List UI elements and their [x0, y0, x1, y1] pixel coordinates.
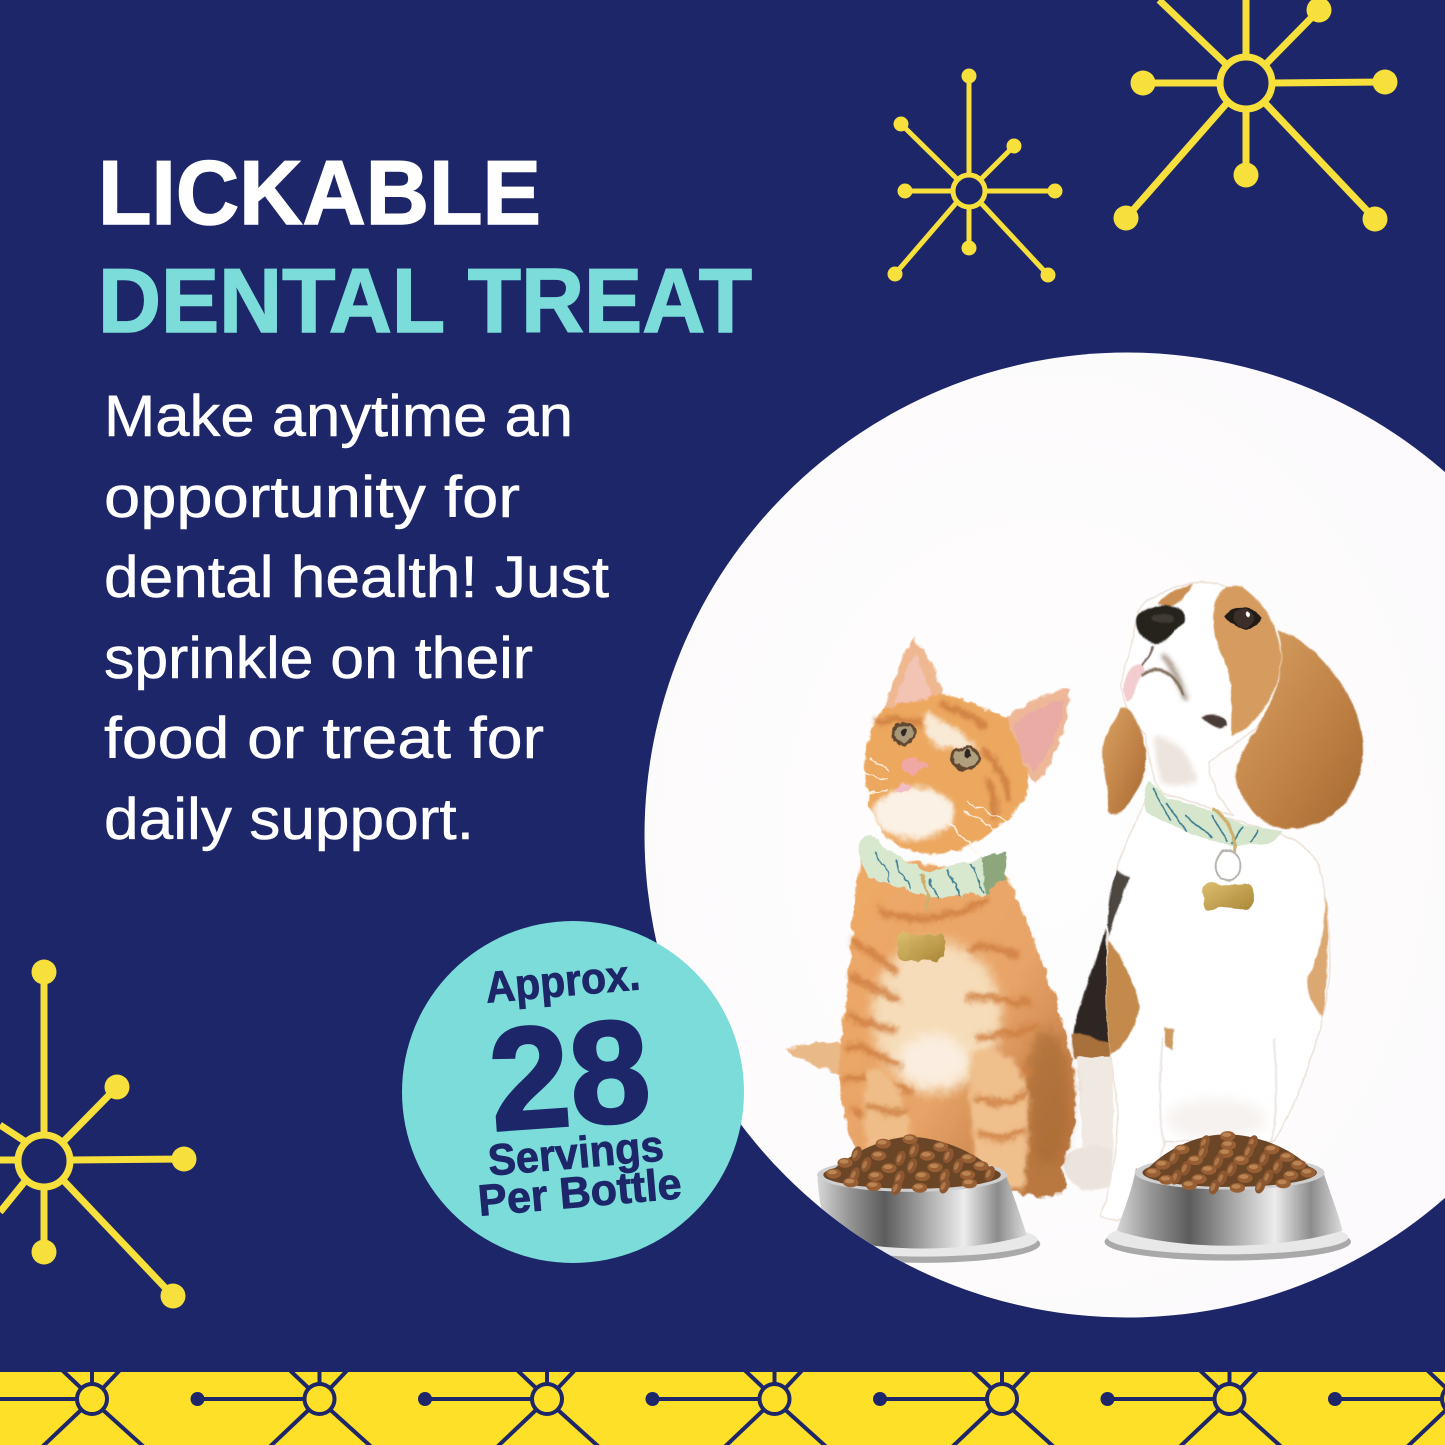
title: DENTAL TREAT [98, 251, 752, 352]
body text: daily support. [104, 787, 474, 852]
dog head [1121, 582, 1280, 816]
right food bowl [1105, 1130, 1351, 1261]
kitten front legs [864, 1069, 910, 1150]
kitten head [864, 693, 1028, 854]
dog right ear [1235, 630, 1363, 828]
kitten fur stripes [845, 900, 1036, 1153]
badge: servings per bottle: 28 [484, 989, 655, 1162]
dog left ear [1103, 707, 1146, 814]
badge: servings per bottle: Per Bottle [476, 1159, 683, 1226]
footer band with network pattern [0, 1369, 1445, 1445]
body text [104, 384, 609, 852]
kitten [786, 638, 1075, 1197]
icon: medium yellow network star [888, 68, 1062, 282]
kitten eyes [888, 719, 982, 772]
badge: servings per bottle [402, 921, 744, 1263]
body text: sprinkle on their [104, 626, 533, 691]
body text: food or treat for [104, 706, 544, 771]
kitten whiskers [864, 757, 1012, 856]
kitten nose and mouth [902, 758, 927, 776]
kitten tail [786, 1042, 843, 1074]
dog nose and muzzle [1136, 606, 1185, 644]
badge: servings per bottle: Servings [486, 1121, 666, 1186]
body text: Make anytime an [104, 384, 573, 449]
body text: opportunity for [104, 465, 520, 530]
beagle puppy [1063, 582, 1363, 1220]
body text: dental health! Just [104, 545, 609, 610]
kitten collar and tag [860, 833, 1006, 962]
kitten ears [884, 636, 944, 709]
icon: large yellow network star [1114, 0, 1398, 232]
title: LICKABLE [98, 143, 541, 244]
circular photo: kitten and beagle puppy [640, 350, 1445, 1320]
title [98, 143, 752, 352]
dog eye [1224, 608, 1261, 629]
icon: bottom-left yellow network star [0, 960, 196, 1308]
badge: servings per bottle: Approx. [483, 950, 642, 1013]
left food bowl [807, 1134, 1040, 1263]
kitten body [839, 856, 1075, 1195]
dog collar and tag [1145, 781, 1282, 910]
